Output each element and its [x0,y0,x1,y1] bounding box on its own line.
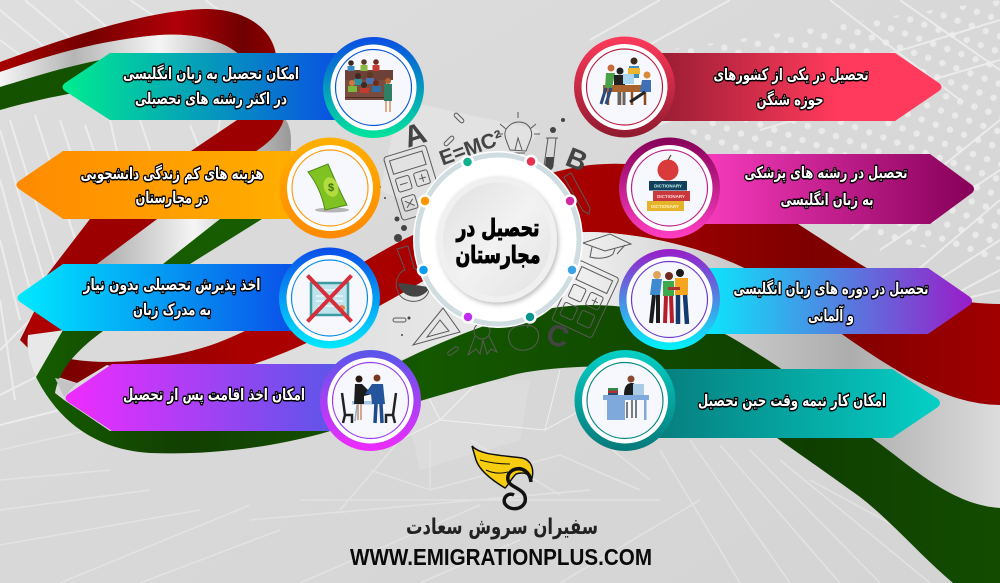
hub outer disc [413,151,583,328]
graduation cap [583,234,631,258]
label [83,275,260,319]
label: تحصیل در رشته های پزشکی [744,163,908,183]
panel: right 3 [619,249,972,350]
panel: left 3 [18,248,380,348]
formula E=MC2: E=MC² [436,126,506,170]
panel: left 4 [66,350,421,451]
pencil [564,173,590,214]
icon: crossed certificate [308,276,352,322]
loop grey fold [55,378,77,397]
icon ring [619,249,720,350]
ribbon descending red [47,118,284,275]
ribbon top green [0,60,120,110]
icon ring [619,138,720,238]
letter B: B [562,141,592,178]
icon ring [574,350,676,451]
ribbon descending green [163,219,262,264]
panel: right 2 [619,138,974,238]
icon: woman at desk [603,376,649,420]
panel: left 2 [16,138,380,238]
label: امکان تحصیل به زبان انگلیسی [123,64,299,83]
icon: apple and dictionaries: DICTIONARY [651,204,679,209]
label: در مجارستان [136,188,208,207]
calculator right [552,260,619,338]
label: به مدرک زبان [133,300,211,319]
loop back outer red [28,300,75,340]
doodles: science and education icons [379,112,631,356]
icon ring [574,36,675,138]
icon ring [280,138,380,238]
panel: right 4 [574,350,940,451]
label: امکان اخذ اقامت پس از تحصیل [123,385,305,405]
logo [350,446,652,570]
ribbon top white [0,35,245,87]
icon: apple and dictionaries: DICTIONARY [657,194,685,199]
icon: business handshake [342,374,396,423]
icon: apple and dictionaries: DICTIONARY [654,184,682,188]
label: تحصیل در یکی از کشورهای [714,65,868,84]
label: اخذ پذیرش تحصیلی بدون نیاز [83,275,260,295]
letter C: C [543,318,572,355]
panel: right 1 [574,36,942,138]
label: هزینه های کم زندگی دانشجویی [80,164,264,183]
panel: left 1 [62,37,424,138]
label: به زبان انگلیسی [780,190,874,209]
wave red band [58,164,1000,405]
ruler triangle [413,308,460,345]
arrow bar [18,264,300,331]
label [123,64,299,108]
hub title: مجارستان [456,241,540,269]
loop back white crescent [27,330,65,380]
label [80,164,264,207]
flask [396,246,430,301]
label: حوزه شنگن [756,90,824,109]
hub ring [417,155,579,324]
arrow bar [685,154,974,224]
small dots [379,118,565,336]
icon ring [279,248,380,348]
award ribbon [468,323,497,355]
icon: banknote [308,164,349,212]
logo: winged S bird mark [472,446,533,509]
hub inner disc [443,182,551,296]
hub white face [421,159,575,320]
arrow bar [640,369,940,438]
apple outline [509,323,538,350]
icon: three students [650,269,688,324]
paperclips [393,112,465,356]
light bulb [497,112,540,157]
hub colour pins [418,156,578,322]
hub title: تحصیل در [456,214,540,242]
central hub [413,151,583,328]
icon: apple and dictionaries [647,155,690,211]
icon: group studying [601,58,651,105]
icon ring [320,350,421,451]
logo: Persian company name: سفیران سروش سعادت [406,515,598,540]
hub inner rim [437,176,557,302]
label [734,279,928,325]
ribbon descending white [97,115,291,264]
label: امکان کار نیمه وقت حین تحصیل [698,391,886,410]
icon: classroom [345,59,393,112]
calculator left [383,145,445,221]
wave white band [180,232,1000,508]
arrow bar [16,151,300,219]
label [714,65,868,109]
label: تحصیل در دوره های زبان انگلیسی [734,279,928,298]
letter A: A [400,116,431,155]
arrow bar [66,364,345,431]
label: در اکثر رشته های تحصیلی [135,89,287,108]
ribbon top red [0,9,286,350]
arrow bar [685,268,972,334]
arrow bar [62,53,345,120]
label [744,163,908,209]
logo: website url: WWW.EMIGRATIONPLUS.COM [350,544,652,570]
test tube [544,138,558,170]
hub title [456,214,540,269]
arrow bar [640,53,942,121]
icon: banknote: $ [328,182,334,194]
wave green band [36,305,1000,583]
icon ring [323,37,424,138]
label: و آلمانی [808,305,854,325]
